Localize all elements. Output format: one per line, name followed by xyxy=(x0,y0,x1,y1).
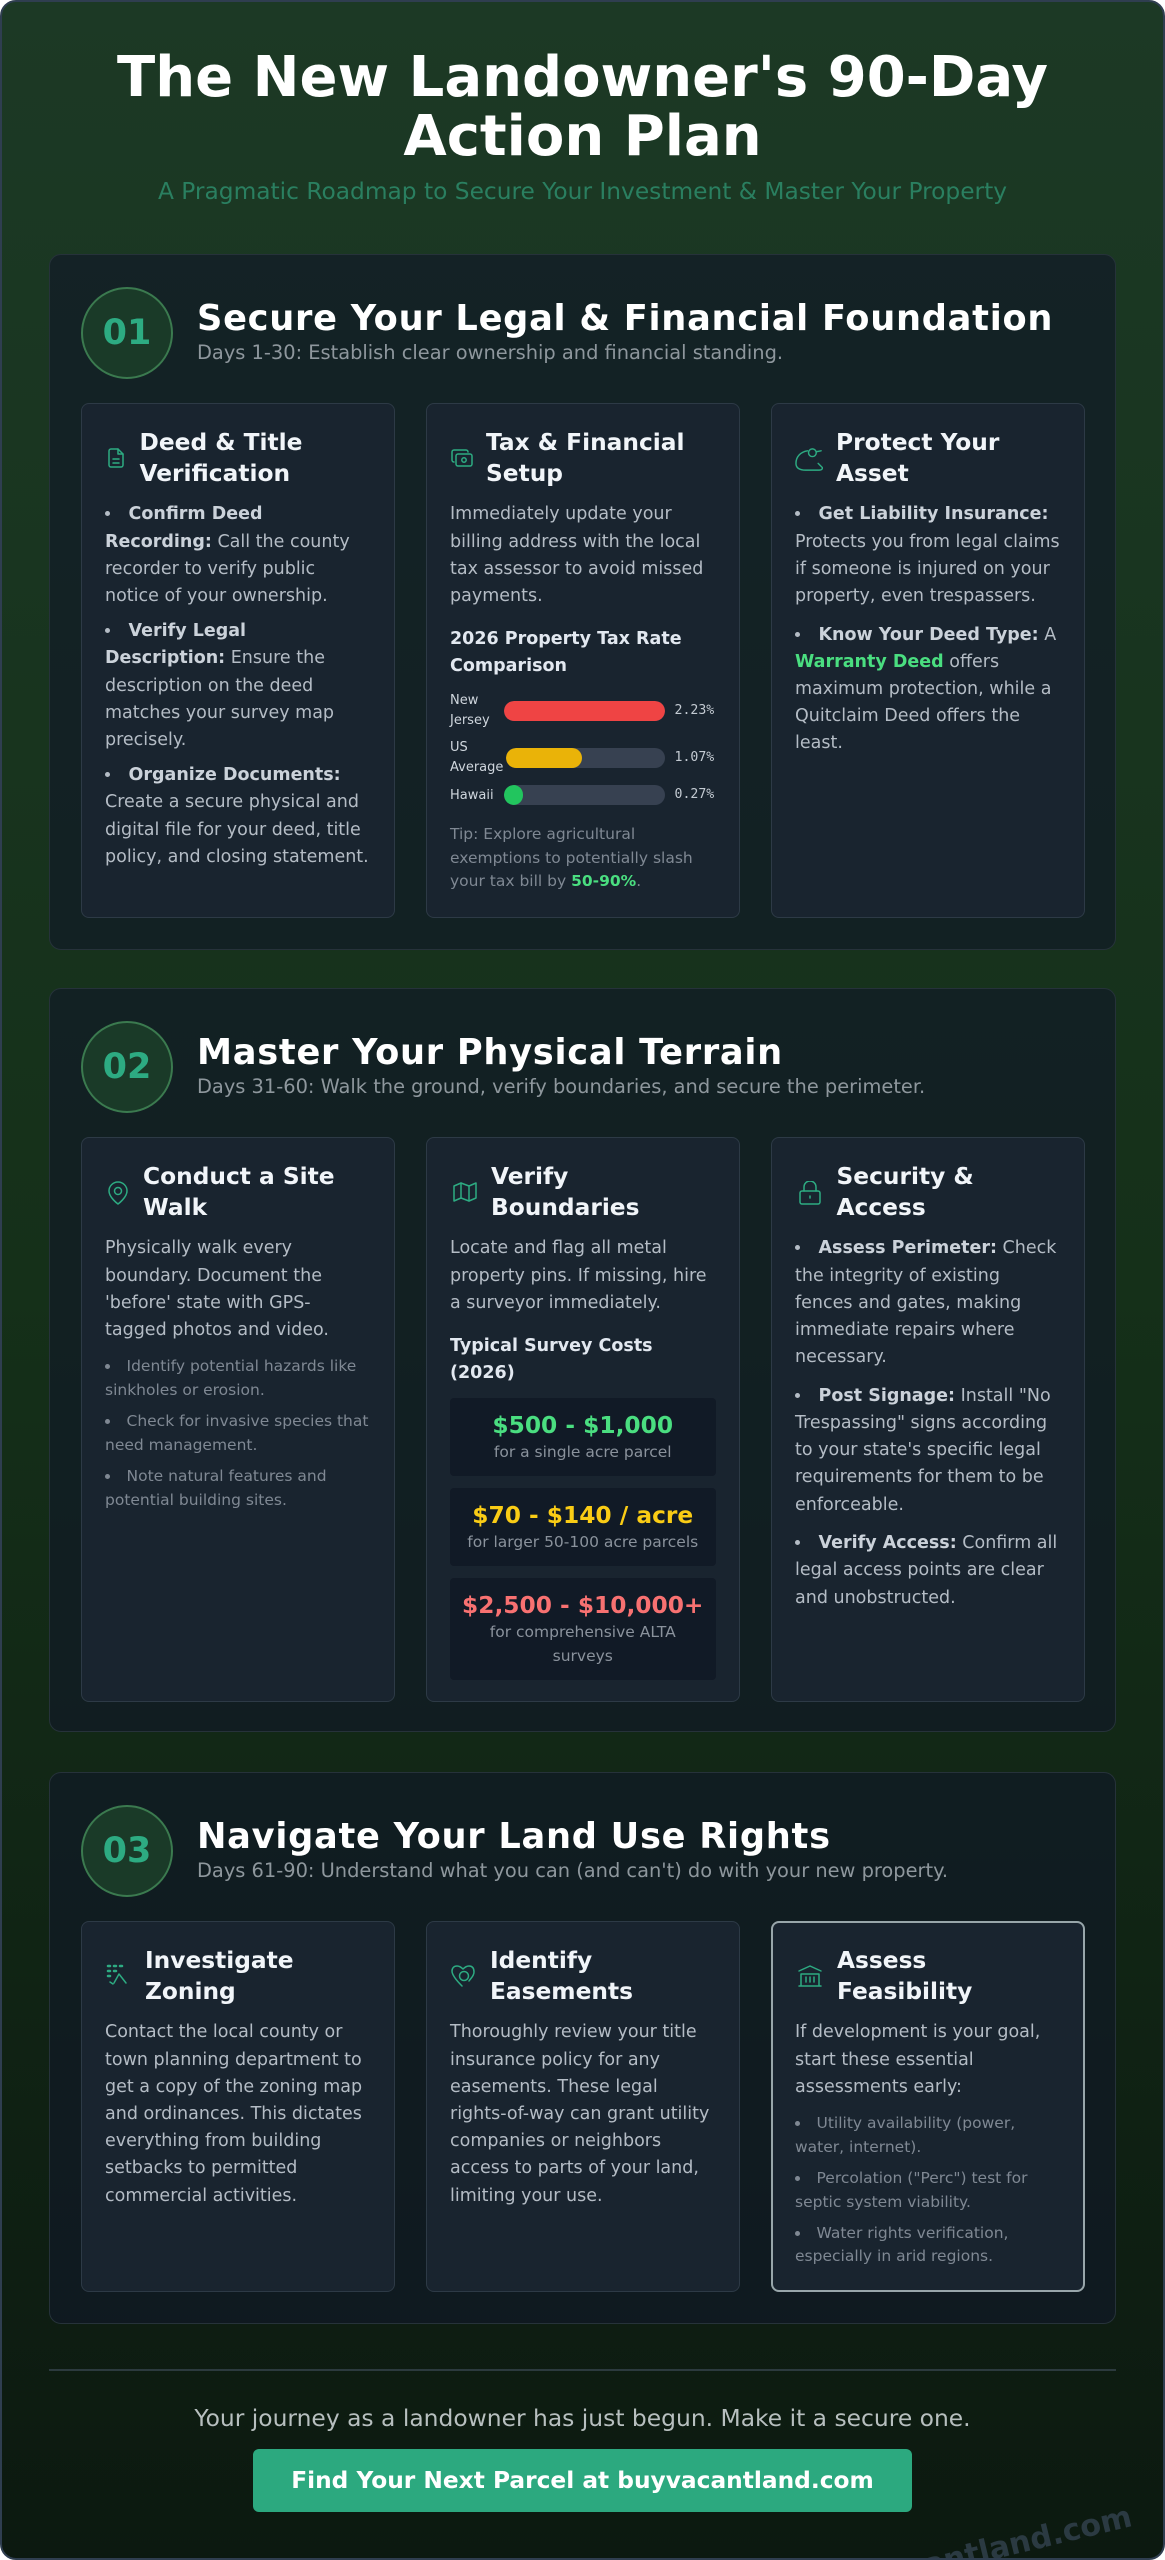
bar chart: property tax rates xyxy=(449,693,714,805)
number badge 02: 02 xyxy=(103,1047,151,1087)
bar: US Average 1.07% xyxy=(450,740,714,775)
feasibility checklist: Water rights verification, especially in arid regions. xyxy=(795,2224,1008,2265)
title: The New Landowner's 90-Day Action Plan xyxy=(117,45,1048,169)
card heading: Identify Easements xyxy=(490,1947,633,2005)
chart title: 2026 Property Tax Rate Comparison xyxy=(450,629,682,676)
subtitle: A Pragmatic Roadmap to Secure Your Investment & Master Your Property xyxy=(158,178,1007,205)
icon: shield hand xyxy=(795,448,823,471)
icon: map pin xyxy=(108,1181,128,1205)
phase 1 title: Secure Your Legal & Financial Foundation xyxy=(197,298,1053,339)
feasibility text: If development is your goal, start these essential assessments early: xyxy=(795,2022,1040,2097)
call to action button xyxy=(253,2449,912,2512)
phase 3 subtitle: Days 61-90: Understand what you can (and can't) do with your new property. xyxy=(197,1859,948,1882)
number badge 02 xyxy=(81,1021,173,1113)
number badge 01 xyxy=(81,287,173,379)
panel: phase 3 land use rights xyxy=(49,1772,1116,2324)
protection checklist xyxy=(795,504,1060,753)
card: identify easements xyxy=(426,1921,740,2292)
survey costs list xyxy=(450,1398,716,1680)
phase 1 subtitle: Days 1-30: Establish clear ownership and financial standing. xyxy=(197,341,783,364)
cost: single acre: for a single acre parcel xyxy=(494,1443,672,1461)
phase 1 heading xyxy=(81,287,1053,379)
card heading: Tax & Financial Setup xyxy=(486,429,684,487)
card heading: Verify Boundaries xyxy=(491,1163,639,1221)
phase 2 subtitle: Days 31-60: Walk the ground, verify boundaries, and secure the perimeter. xyxy=(197,1075,925,1098)
card heading: Investigate Zoning xyxy=(145,1947,294,2005)
card heading: Conduct a Site Walk xyxy=(143,1163,335,1221)
phase 2 title: Master Your Physical Terrain xyxy=(197,1032,783,1073)
icon: zoning grid xyxy=(106,1964,127,1985)
tax intro text: Immediately update your billing address with the local tax assessor to avoid missed payments. xyxy=(450,504,703,606)
site walk checklist: Identify potential hazards like sinkholes or erosion. xyxy=(105,1357,356,1399)
header xyxy=(117,45,1048,205)
bar: US Average 1.07%: US Average xyxy=(450,740,503,775)
bar: New Jersey 2.23% xyxy=(449,693,714,728)
deed checklist xyxy=(105,504,369,867)
card: assess feasibility xyxy=(771,1921,1084,2292)
bar: Hawaii 0.27% xyxy=(450,785,714,805)
boundaries text: Locate and flag all metal property pins. If missing, hire a surveyor immediately. xyxy=(450,1238,707,1313)
card heading: Deed & Title Verification xyxy=(140,429,302,487)
site walk checklist: Note natural features and potential building sites. xyxy=(105,1467,327,1509)
security checklist: Verify Access: Confirm all legal access points are clear and unobstructed. xyxy=(795,1533,1057,1608)
phase 2 heading xyxy=(81,1021,925,1113)
bar: New Jersey 2.23%: New Jersey xyxy=(450,693,490,728)
deed checklist: Verify Legal Description: Ensure the description on the deed matches your survey map precisely. xyxy=(105,621,334,750)
bar: Hawaii 0.27%: Hawaii xyxy=(450,788,494,803)
card: investigate zoning xyxy=(81,1921,394,2292)
card heading: Assess Feasibility xyxy=(837,1947,972,2005)
survey costs title: Typical Survey Costs (2026) xyxy=(450,1336,653,1383)
cost: per acre: $70 - $140 / acre xyxy=(472,1502,693,1529)
card: protect your asset xyxy=(771,403,1084,918)
easements text: Thoroughly review your title insurance policy for any easements. These legal rights-of-way can grant utility companies or neighbors access to parts of your land, limiting your use. xyxy=(450,2022,709,2206)
site walk checklist xyxy=(105,1357,368,1509)
phase 3 heading xyxy=(81,1805,948,1897)
cost: per acre: for larger 50-100 acre parcels xyxy=(467,1533,698,1551)
protection checklist: Know Your Deed Type: A Warranty Deed offers maximum protection, while a Quitclaim Deed offers the least. xyxy=(795,625,1056,753)
card: conduct a site walk xyxy=(81,1137,394,1702)
bar: US Average 1.07%: 1.07% xyxy=(674,750,714,765)
protection checklist: Get Liability Insurance: Protects you from legal claims if someone is injured on your property, even trespassers. xyxy=(795,504,1060,606)
card: tax and financial setup xyxy=(426,403,740,918)
zoning text: Contact the local county or town planning department to get a copy of the zoning map and ordinances. This dictates everything from building setbacks to permitted commercial activities. xyxy=(105,2022,362,2206)
card: security and access xyxy=(771,1137,1084,1702)
card: deed and title verification xyxy=(81,403,394,918)
feasibility checklist xyxy=(795,2114,1028,2265)
security checklist xyxy=(794,1238,1057,1608)
icon: heart ring xyxy=(451,1965,475,1987)
call to action button: Find Your Next Parcel at buyvacantland.com xyxy=(291,2467,874,2494)
card heading: Protect Your Asset xyxy=(836,429,999,487)
feasibility checklist: Percolation ("Perc") test for septic system viability. xyxy=(795,2169,1027,2211)
number badge 01: 01 xyxy=(103,313,151,353)
icon: padlock xyxy=(799,1181,821,1205)
panel: phase 2 physical terrain xyxy=(49,988,1116,1732)
cost: ALTA survey: $2,500 - $10,000+ xyxy=(462,1592,703,1619)
number badge 03: 03 xyxy=(103,1831,151,1871)
card: verify boundaries xyxy=(426,1137,740,1702)
panel: phase 1 legal and financial foundation xyxy=(49,254,1116,950)
icon: map xyxy=(453,1182,477,1202)
bar: Hawaii 0.27%: 0.27% xyxy=(674,787,714,802)
icon: building xyxy=(798,1965,822,1987)
site walk checklist: Check for invasive species that need management. xyxy=(105,1412,368,1454)
icon: banknotes xyxy=(451,449,473,467)
cost: ALTA survey: for comprehensive ALTA surveys xyxy=(490,1623,676,1665)
card heading: Security & Access xyxy=(836,1163,974,1221)
security checklist: Post Signage: Install "No Trespassing" signs according to your state's specific legal requirements for them to be enforceable. xyxy=(795,1386,1051,1515)
security checklist: Assess Perimeter: Check the integrity of existing fences and gates, making immediate repairs where necessary. xyxy=(795,1238,1056,1367)
icon: document xyxy=(108,448,124,468)
tip: Tip: Explore agricultural exemptions to potentially slash your tax bill by 50-90%. xyxy=(450,825,693,890)
feasibility checklist: Utility availability (power, water, internet). xyxy=(795,2114,1015,2156)
bar: New Jersey 2.23%: 2.23% xyxy=(674,703,714,718)
closing line: Your journey as a landowner has just begun. Make it a secure one. xyxy=(194,2404,971,2432)
deed checklist: Organize Documents: Create a secure physical and digital file for your deed, title policy, and closing statement. xyxy=(105,765,369,867)
cost: single acre xyxy=(450,1398,716,1476)
cost: ALTA survey xyxy=(450,1578,716,1680)
cost: single acre: $500 - $1,000 xyxy=(492,1412,673,1439)
number badge 03 xyxy=(81,1805,173,1897)
site walk text: Physically walk every boundary. Document the 'before' state with GPS-tagged photos and video. xyxy=(105,1238,329,1340)
cost: per acre xyxy=(450,1488,716,1566)
phase 3 title: Navigate Your Land Use Rights xyxy=(197,1816,831,1857)
deed checklist: Confirm Deed Recording: Call the county recorder to verify public notice of your ownership. xyxy=(105,504,350,606)
